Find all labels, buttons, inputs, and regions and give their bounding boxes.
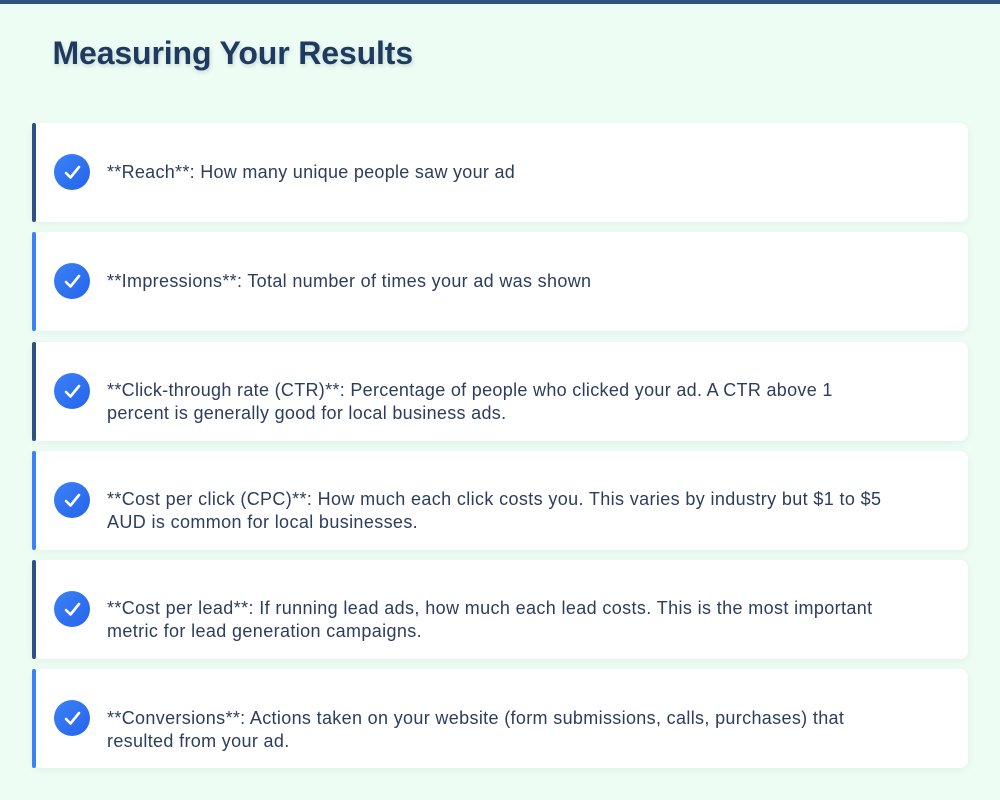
panel: cost per lead [32, 560, 968, 659]
panel: conversions [32, 669, 968, 768]
text: conversions [107, 708, 844, 751]
text: conversions: resulted from your ad. [107, 731, 290, 751]
text: cpc: AUD is common for local businesses. [107, 512, 418, 532]
text: reach: **Reach**: How many unique people saw your ad [107, 162, 515, 182]
text: cost per lead [107, 598, 873, 641]
icon: check [54, 700, 90, 736]
panel: cpc [32, 451, 968, 550]
text: ctr: percent is generally good for local business ads. [107, 403, 506, 423]
icon: check [54, 373, 90, 409]
icon: check [54, 482, 90, 518]
top bar [0, 0, 1000, 4]
text: impressions: **Impressions**: Total number of times your ad was shown [107, 270, 591, 290]
panel: ctr [32, 342, 968, 441]
title: Measuring Your Results [52, 35, 413, 71]
panel: impressions [32, 232, 968, 331]
text: cost per lead: metric for lead generation campaigns. [107, 621, 422, 641]
text: cpc [107, 488, 881, 532]
icon: check [54, 154, 90, 190]
text: ctr [107, 380, 833, 423]
panel: reach [32, 123, 968, 222]
icon: check [54, 263, 90, 299]
text: conversions: **Conversions**: Actions taken on your website (form submissions, calls, purchases) that [107, 708, 844, 728]
text: cpc: **Cost per click (CPC)**: How much each click costs you. This varies by industry but $1 to $5 [107, 488, 881, 508]
text: cost per lead: **Cost per lead**: If running lead ads, how much each lead costs. This is the most important [107, 598, 873, 618]
icon: check [54, 591, 90, 627]
text: ctr: **Click-through rate (CTR)**: Percentage of people who clicked your ad. A CTR above 1 [107, 380, 833, 400]
